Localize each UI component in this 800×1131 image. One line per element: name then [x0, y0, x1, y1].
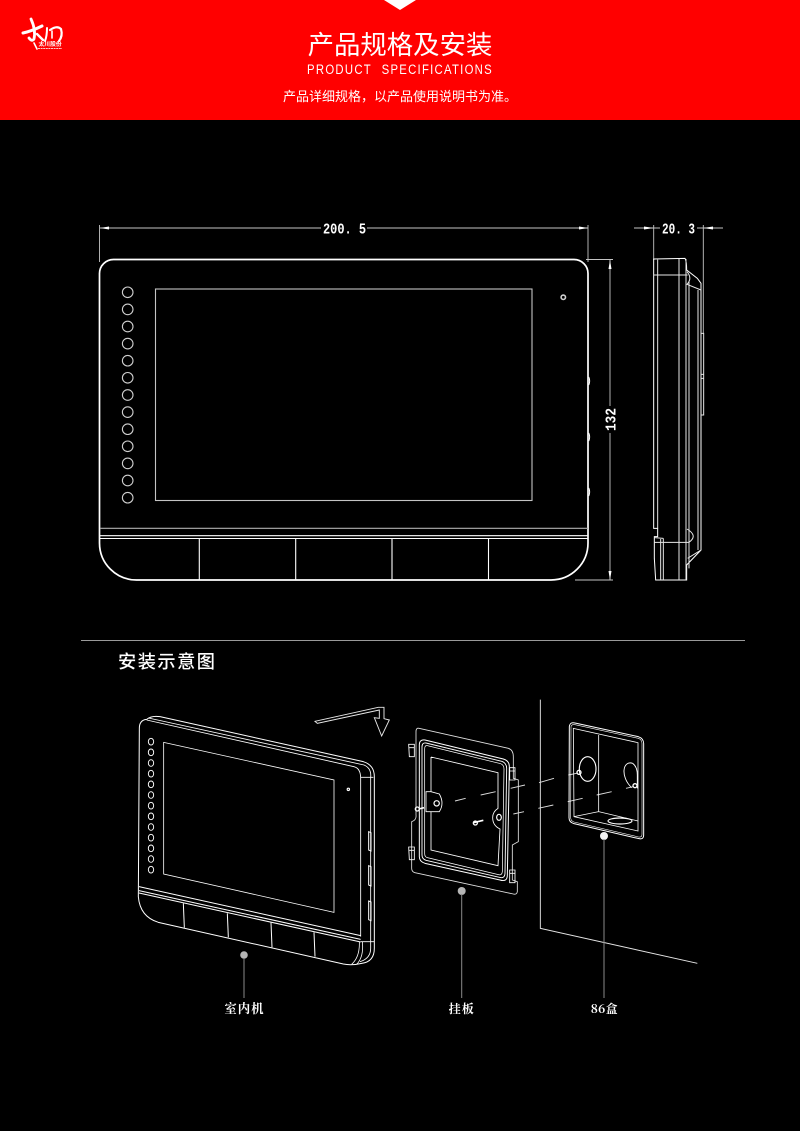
window: [431, 757, 500, 866]
dimension: height 132: 132: [604, 408, 620, 431]
body verticals: [658, 259, 698, 580]
leader: indoor unit: 室内机: [224, 999, 265, 1017]
dimension: depth 20.3: 20. 3: [662, 222, 695, 238]
body outline: [654, 258, 701, 580]
box interior: [573, 728, 638, 831]
header banner: [0, 0, 800, 120]
side bumps: [588, 377, 591, 496]
dimension: width 200.5: 200. 5: [323, 222, 366, 238]
knockout holes: [579, 757, 596, 781]
rear buttons: [701, 333, 704, 415]
dimension: width 200.5: [100, 222, 588, 262]
wall lines: [540, 700, 697, 963]
notch triangle: [384, 0, 416, 10]
indicator buttons: [122, 287, 133, 503]
screen: [164, 742, 334, 912]
perspective device: [138, 716, 374, 965]
leader: mounting plate: 挂板: [449, 1000, 475, 1017]
junction box: [569, 723, 644, 839]
side view drawing: [654, 258, 704, 580]
key dividers: [183, 903, 315, 957]
box flange: [569, 723, 644, 839]
section divider: [81, 640, 745, 641]
buttons column: [148, 738, 154, 873]
leader: 86 box: 86盒: [591, 1000, 618, 1017]
camera dot: [561, 295, 566, 299]
mount tab right: [497, 814, 501, 820]
direction arrow: [315, 707, 389, 736]
frame: [419, 740, 509, 881]
logo: 太川股份: [38, 40, 62, 48]
body horizontals: [654, 275, 689, 542]
alignment dashes: [455, 773, 633, 814]
device outline: [100, 260, 588, 580]
camera: [347, 788, 349, 790]
note: 产品详细规格，以产品使用说明书为准。: [283, 89, 517, 104]
band lines: [139, 887, 361, 942]
front edge: [147, 718, 371, 962]
dimension: height 132: [575, 260, 620, 580]
english subtitle: PRODUCT SPECIFICATIONS: [307, 62, 493, 77]
title: 产品规格及安装: [308, 30, 492, 60]
leader: mounting plate: [449, 887, 475, 1017]
clips: [409, 744, 515, 883]
dimension: depth 20.3: [634, 222, 723, 333]
mount tab left: [426, 792, 442, 812]
device shell: [138, 716, 374, 965]
box screws: [577, 770, 581, 774]
lower band lines: [100, 527, 588, 529]
leader: 86 box: [591, 832, 618, 1017]
mounting plate: [409, 728, 518, 894]
logo: [22, 18, 63, 50]
plate outline: [412, 728, 518, 894]
screws: [419, 808, 483, 823]
section heading: 安装示意图: [118, 652, 216, 672]
screen: [156, 289, 532, 500]
hinge details: [687, 272, 701, 558]
side buttons: [369, 832, 371, 921]
front view drawing: [100, 260, 590, 580]
key dividers: [199, 538, 489, 580]
leader: indoor unit: [224, 951, 265, 1017]
